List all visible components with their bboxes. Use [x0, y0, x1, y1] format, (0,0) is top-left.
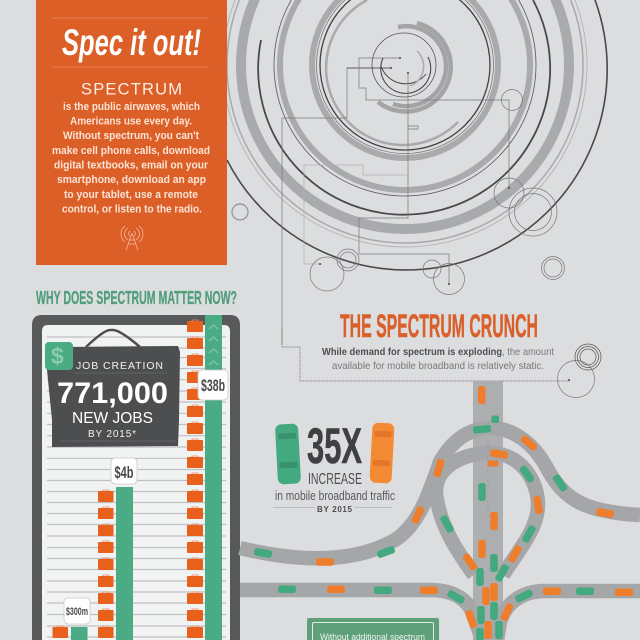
subheading: spectrum: SPECTRUM — [81, 80, 182, 98]
text block: spectrum definition: smartphone, download an app — [57, 174, 206, 186]
job creation heading: JOB CREATION — [76, 360, 163, 372]
heading: spec it out: Spec it out! — [62, 22, 201, 63]
stat: 771,000: 771,000 — [57, 377, 168, 410]
icon: dollar tile: $ — [51, 343, 64, 369]
panel: clipboard chart — [32, 315, 240, 640]
label: 4b — [111, 458, 137, 484]
icon: radio tower — [121, 226, 143, 250]
text block: spectrum definition: make cell phone calls, download — [52, 145, 210, 157]
icon: green car — [275, 423, 301, 485]
text block: spectrum crunch description: While demand for spectrum is exploding, the amount — [322, 346, 554, 358]
bar: green 38b — [205, 315, 222, 640]
text block: spectrum definition: Without spectrum, you can't — [63, 130, 199, 142]
label: 300m — [64, 598, 90, 624]
label: 38b — [198, 370, 228, 400]
connector wires and nodes — [232, 57, 601, 398]
increase: INCREASE — [308, 471, 362, 488]
label: 4b: $4b — [114, 463, 134, 482]
traffic cars: orange — [316, 386, 632, 638]
callout: green sign — [307, 618, 439, 640]
briefcase column: 300m — [52, 626, 68, 638]
text block: spectrum definition: Americans use every day. — [70, 116, 192, 128]
icon: orange car — [369, 422, 395, 484]
text block: spectrum definition: to your tablet, use a remote — [64, 189, 198, 201]
bar: green 300m — [71, 627, 88, 640]
in mobile broadband traffic: in mobile broadband traffic — [275, 488, 395, 503]
by 2015: BY 2015 — [317, 505, 353, 514]
spectrum rings diagram — [223, 0, 607, 270]
highway roads — [240, 381, 640, 640]
callout: 35x increase — [273, 418, 395, 514]
traffic cars: green — [254, 416, 594, 640]
briefcase column: 4b — [98, 490, 114, 638]
text block: spectrum definition — [52, 101, 210, 216]
briefcase column: 38b — [187, 320, 203, 638]
by 2015: BY 2015* — [88, 429, 136, 440]
panel: spec it out — [36, 0, 227, 265]
text block: spectrum definition: is the public airwaves, which — [63, 101, 200, 113]
text block: spectrum crunch description: available for mobile broadband is relatively static. — [332, 360, 544, 372]
new jobs: NEW JOBS — [72, 410, 153, 427]
text block: spectrum crunch description — [322, 346, 554, 372]
text block: spectrum definition: control, or listen to the radio. — [62, 204, 202, 216]
bar: green 4b — [116, 487, 133, 640]
text block: spectrum definition: digital textbooks, email on your — [54, 160, 209, 172]
stat: 35x: 35X — [307, 418, 362, 474]
heading: why does spectrum matter now: WHY DOES SPECTRUM MATTER NOW? — [36, 288, 237, 308]
label: 38b: $38b — [201, 376, 225, 395]
job creation briefcase — [45, 330, 180, 447]
label: 300m: $300m — [66, 606, 88, 618]
